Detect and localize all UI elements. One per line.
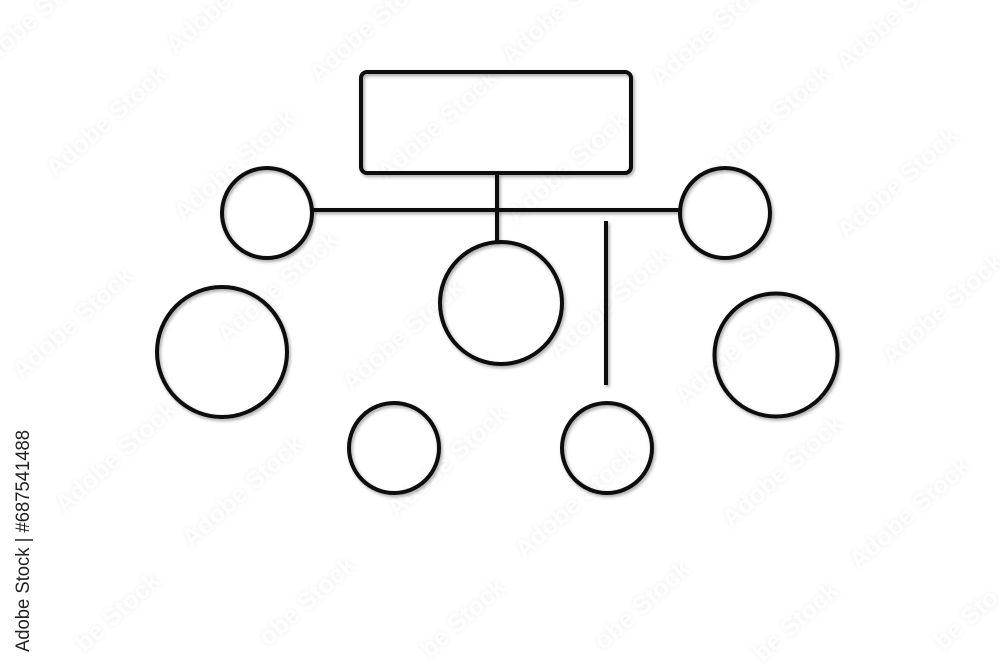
background watermarks: be Stock [748, 577, 844, 667]
connector: vertical line from box to center circle [495, 174, 499, 242]
background watermarks: be Stock [70, 567, 166, 657]
background watermarks: Adobe Stock [544, 241, 676, 365]
background watermarks: Adobe Stock [844, 451, 976, 575]
circle: middle left large [157, 287, 287, 417]
circle: bottom left [349, 403, 439, 493]
background watermarks: Adobe Stock [177, 429, 309, 553]
background watermarks: Adobe Stock [670, 287, 802, 411]
background watermarks: Adobe Stock [50, 395, 182, 519]
background watermarks: Adobe Stock [704, 59, 836, 183]
background watermarks: Adobe Stock [41, 59, 173, 183]
background watermarks: Adobe Stock [337, 273, 469, 397]
background watermarks: Adobe Stock [510, 440, 642, 564]
background watermarks: Adobe Stock [717, 409, 849, 533]
top rectangle box [361, 72, 631, 173]
background watermarks: Adobe Stock [382, 399, 514, 523]
stock id side label: Adobe Stock | #687541488 [13, 430, 34, 652]
background watermarks: Adobe Stock [372, 63, 504, 187]
background watermarks: obe Stock [588, 555, 696, 655]
connector: standalone vertical line [604, 221, 608, 385]
background watermarks: Adobe Stock [212, 225, 344, 349]
background watermarks: Adobe Stock [7, 261, 139, 385]
circle: middle right large [714, 294, 838, 416]
connector: horizontal line between top circles [312, 208, 680, 212]
background watermarks: Adobe Stock [832, 121, 964, 245]
background watermarks: Adobe Stock [502, 105, 634, 229]
background watermarks: be Stock [415, 573, 511, 663]
circle: upper left [222, 168, 312, 258]
circle: bottom right [562, 403, 652, 493]
background watermarks: Adobe Stock [169, 103, 301, 227]
circle: center [440, 242, 562, 364]
background watermarks: obe Stock [253, 551, 361, 651]
circle: upper right [680, 168, 770, 258]
